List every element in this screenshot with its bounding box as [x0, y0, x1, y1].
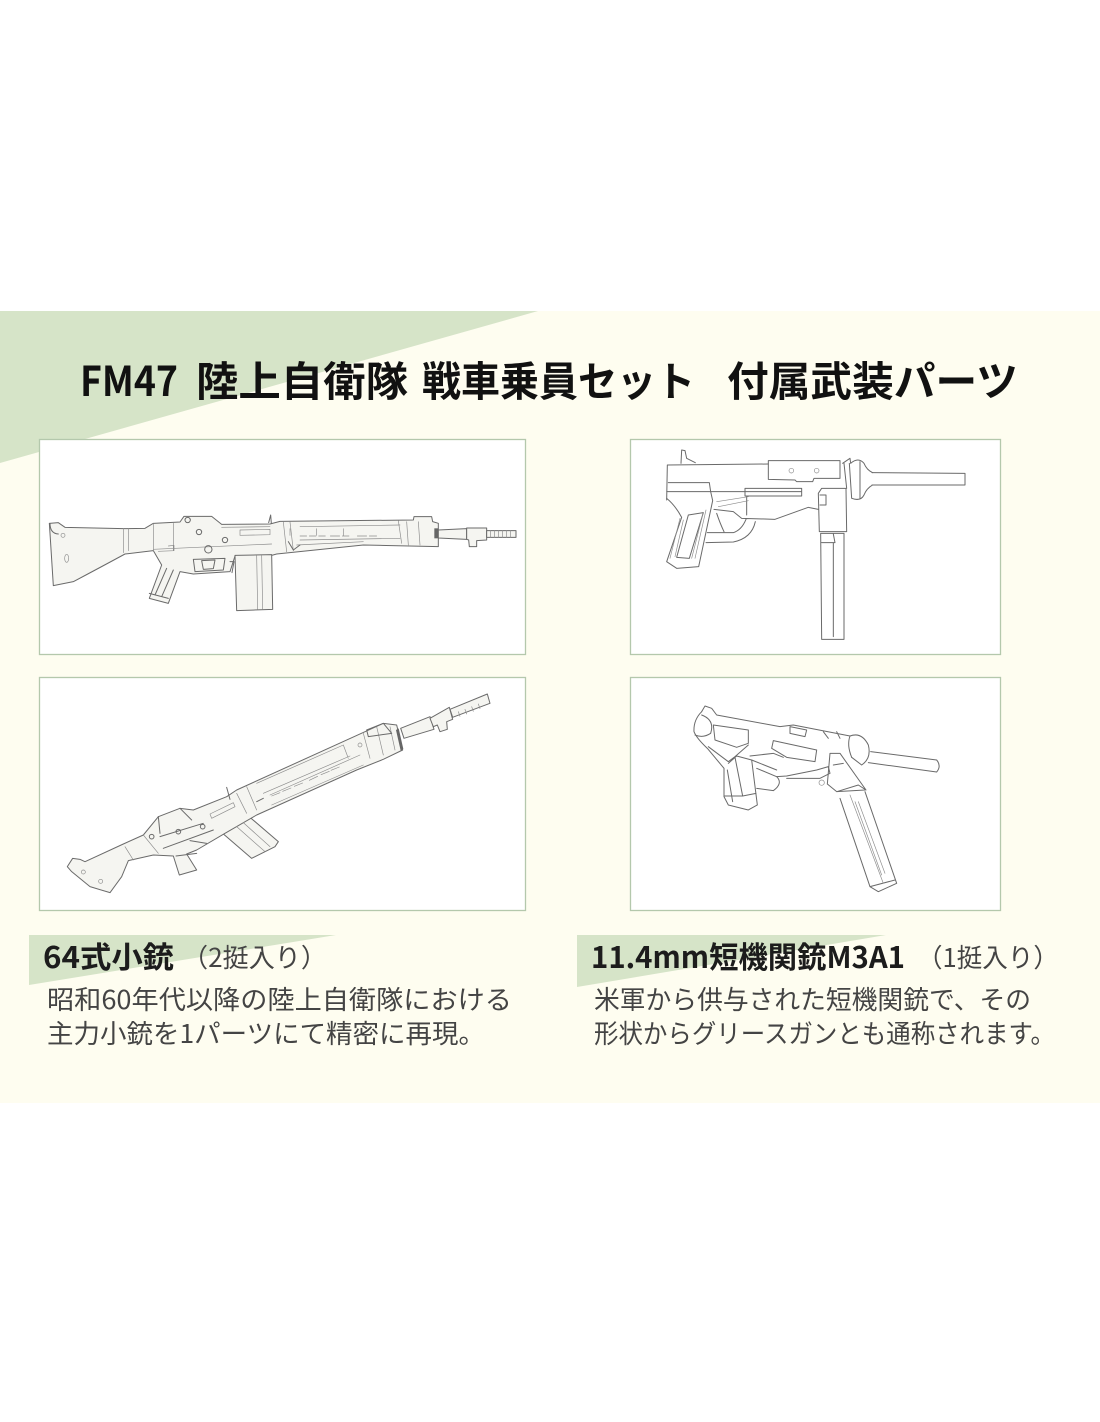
- ejection cover: [768, 461, 840, 482]
- barrel: [868, 752, 939, 772]
- magazine housing and magazine: [818, 488, 847, 532]
- background panel: [0, 311, 1100, 1103]
- title: 付属武装パーツ: [727, 348, 1018, 408]
- green corner triangle: [0, 311, 538, 463]
- panel: M3A1 side view: [630, 440, 1000, 654]
- cover and guard: [750, 741, 830, 791]
- panel: 64式小銃 angled view: [40, 678, 526, 910]
- submachine gun angled view drawing: [694, 706, 939, 892]
- trigger and guard: [706, 496, 818, 543]
- green ribbon left: [29, 935, 336, 985]
- receiver top: [702, 706, 869, 765]
- heading: 11.4mm短機関銃M3A1: [591, 933, 1059, 977]
- panel: M3A1 angled view: [630, 678, 1000, 910]
- heading: 11.4mm短機関銃M3A1: （1挺入り）: [917, 938, 1059, 975]
- title: [80, 348, 1018, 408]
- text: 64式小銃 description: 主力小銃を1パーツにて精密に再現。: [47, 1014, 485, 1051]
- receiver top and rear: [667, 464, 802, 500]
- grip: [667, 492, 713, 568]
- text: M3A1 description: 形状からグリースガンとも通称されます。: [594, 1014, 1055, 1051]
- heading: 64式小銃: （2挺入り）: [182, 938, 327, 975]
- rifle angled view drawing: [67, 694, 490, 893]
- text: 64式小銃 description: [47, 980, 512, 1051]
- barrel: [872, 473, 965, 485]
- title: 陸上自衛隊: [196, 348, 408, 408]
- muzzle bushing: [843, 458, 873, 499]
- rear cap: [694, 712, 748, 768]
- text: M3A1 description: 米軍から供与された短機関銃で、その: [594, 980, 1031, 1017]
- rear sight: [681, 450, 695, 463]
- green ribbon right: [577, 935, 886, 987]
- rifle side view drawing: [49, 515, 516, 611]
- heading: 11.4mm短機関銃M3A1: 11.4mm短機関銃M3A1: [591, 933, 905, 977]
- submachine gun side view drawing: [667, 450, 965, 639]
- grip: [724, 756, 757, 810]
- heading: 64式小銃: 64式小銃: [43, 933, 174, 977]
- title: FM47: [80, 348, 178, 408]
- magazine housing: [827, 753, 866, 792]
- text: M3A1 description: [594, 980, 1055, 1051]
- magazine: [840, 792, 897, 892]
- title: 戦車乗員セット: [422, 348, 695, 408]
- heading: 64式小銃: [43, 933, 327, 977]
- panel: 64式小銃 side view: [40, 440, 526, 654]
- text: 64式小銃 description: 昭和60年代以降の陸上自衛隊における: [47, 980, 512, 1017]
